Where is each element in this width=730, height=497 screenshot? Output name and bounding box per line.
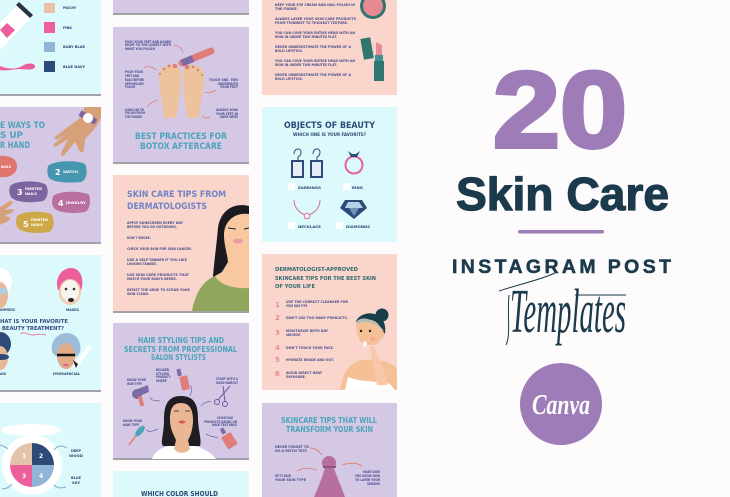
labels and question: MASKS <box>66 308 79 312</box>
checkboxes and labels: EARRINGS <box>298 186 321 190</box>
numbered list: YOUR SKIN TYPE. <box>285 304 308 308</box>
heading: E WAYS TO <box>0 121 45 131</box>
blobs: numbered list: 4 <box>58 199 64 208</box>
panel: ways to dress up your hand <box>0 107 101 244</box>
checkboxes and labels: RING <box>352 186 363 190</box>
numbered list: 3 <box>275 329 280 337</box>
checkboxes and labels: DIAMONDS <box>346 225 370 229</box>
text: tips <box>125 40 238 119</box>
subtitle: Instagram Post: INSTAGRAM POST <box>452 256 671 278</box>
text: tips list: BEFORE YOU GO OUTDOORS. <box>127 225 177 229</box>
panel: top lavender fragment <box>113 0 249 15</box>
heading: SECRETS FROM PROFESSIONAL <box>124 345 237 354</box>
blobs: numbered list: 5 <box>23 220 29 229</box>
arrows <box>0 445 67 489</box>
icon: serum bottle <box>220 427 238 450</box>
text: tips: YOUR SKIN TYPE <box>274 478 306 482</box>
blobs: numbered list: PAINTED <box>25 187 42 191</box>
icon: white mirror handle <box>1 424 61 436</box>
labels and question: ASK <box>0 372 6 376</box>
text: tips: APPLYING ANY <box>125 82 144 86</box>
text: tips: CHOOSE HAIR <box>217 416 233 420</box>
labels and question: HYDRAFACIAL <box>53 372 81 376</box>
colour labels: BLUE <box>71 476 81 480</box>
text: tips list: SKIN CLEAN. <box>127 292 150 296</box>
icon: ring <box>346 151 362 174</box>
blobs: numbered list: NAILS <box>25 192 38 196</box>
heading: SKIN CARE TIPS FROM <box>127 190 226 200</box>
icon: navy towel face <box>0 332 11 370</box>
text: tips: POLISH <box>125 85 135 89</box>
colour labels: DEEP <box>71 449 81 453</box>
colour labels <box>69 449 83 485</box>
heading: BOTOX AFTERCARE <box>140 142 222 152</box>
illustration: woman with towel <box>340 308 397 390</box>
blobs: numbered list: JEWELRY <box>65 201 87 205</box>
icon: hairbrush <box>129 424 146 445</box>
title number: 20: 20 <box>493 49 627 170</box>
text: tips: STYLING <box>156 372 169 376</box>
text: tips: WHAT YOU POLISH <box>125 47 155 51</box>
text: tips: YOU CAN COVE YOUR ENTIRE HEAD WITH AN <box>274 59 355 63</box>
icon: hand with watch <box>53 107 101 156</box>
legend swatches: PEACHY <box>63 6 76 10</box>
panel: which colour poll <box>113 471 249 497</box>
heading: DERMATOLOGIST-APPROVED <box>275 267 358 273</box>
legend swatches: PINK <box>63 26 72 30</box>
heading: OF YOUR LIFE <box>275 284 315 290</box>
arrows <box>297 448 362 471</box>
text: tips: BOLD LIPSTICK. <box>275 49 304 53</box>
heading <box>0 121 45 151</box>
heading <box>281 416 377 434</box>
text: tips: KNOW YOUR <box>127 378 146 382</box>
arrows <box>146 385 218 438</box>
text: tips: UNDERNEATH <box>218 82 238 86</box>
icon: lipstick <box>360 37 384 81</box>
text: tips: HAIR TYPE <box>123 423 139 427</box>
icon: earrings <box>292 149 322 177</box>
numbered list: AVOID DIRECT HEAT <box>286 371 322 375</box>
blobs: numbered list: NAILS <box>31 223 44 227</box>
text: tips: RIGHT TO THE LOWEST WITH <box>125 43 171 47</box>
text: tips: MAKE SURE <box>363 470 380 474</box>
icon: necklace <box>294 200 320 219</box>
badge: Canva logo <box>520 363 602 445</box>
icon: toenails <box>159 64 203 76</box>
icon: hydrafacial face <box>52 333 92 369</box>
panel: makeup tips <box>262 0 397 95</box>
numbered list: DON'T TOUCH YOUR FACE. <box>286 346 335 350</box>
text: tips <box>274 3 356 81</box>
text: tips: TOUCH ONE, TWO <box>209 78 238 82</box>
text: tips <box>123 368 238 427</box>
heading <box>135 132 227 152</box>
text: tips: BOLD LIPSTICK. <box>275 77 304 81</box>
text: tips list: MATCH YOUR SKIN'S NEEDS. <box>127 277 178 281</box>
text: tips list: CHECK YOUR SKIN FOR SKIN CANCER. <box>127 247 192 251</box>
text: tips list <box>127 221 192 296</box>
heading <box>127 190 226 212</box>
labels and question: HAT IS YOUR FAVORITE <box>0 319 68 325</box>
blobs: numbered list: NAILS <box>1 165 11 169</box>
text: tips list: DON'T SMOKE. <box>127 236 151 240</box>
text: tips: PRODUCT- <box>156 375 171 379</box>
text: tips: PRODUCTS BASED ON <box>204 420 237 424</box>
heading: SKINCARE TIPS THAT WILL <box>281 416 377 425</box>
illustration: woman with closed eyes <box>192 205 249 311</box>
icon: mask face <box>57 268 82 305</box>
text: tips: NAILS BEFORE <box>125 78 144 82</box>
text: tips: ALWAYS LAYER YOUR SKIN-CARE PRODUCTS <box>275 17 356 21</box>
text: tips: HAIR TEXTURES <box>212 423 237 427</box>
icon: scissors <box>214 386 230 406</box>
icon: compress face <box>0 268 12 308</box>
labels and question <box>0 308 81 376</box>
chart: colour wheel: 3 <box>22 473 26 480</box>
text: tips: ALWAYS ADD THE <box>125 108 144 112</box>
numbered list: AND NIGHT. <box>286 333 301 337</box>
icon: diamond <box>340 200 367 219</box>
text: tips: KNOW YOUR <box>123 419 142 423</box>
text: tips: BOLDER <box>156 368 169 372</box>
text: tips: FROM THINNEST TO THICKEST TEXTURE. <box>275 21 349 25</box>
colour labels: WOOD <box>69 454 83 458</box>
heading <box>124 336 237 362</box>
numbered list: 2 <box>275 314 280 322</box>
panel: favourite beauty treatment <box>0 255 101 392</box>
text: tips: DO A PATCH TEST <box>275 449 307 453</box>
icon: lotion tube <box>0 2 33 50</box>
text: tips: GOOD HAIRCUT <box>216 381 238 385</box>
icon: pink cream swipe <box>0 64 35 70</box>
text: tips <box>274 445 380 486</box>
icon: bottle <box>314 456 345 497</box>
title divider <box>518 230 604 234</box>
panel: dermatologist-approved tips <box>262 254 397 390</box>
heading: R HAND <box>0 141 30 151</box>
text: tips: HAIR TYPE <box>127 382 142 386</box>
numbered list: HYDRATE INSIDE AND OUT. <box>286 358 335 362</box>
text: tips: START WITH A <box>216 377 238 381</box>
text: tips list: LOOKING TANNED. <box>127 262 157 266</box>
numbered list: 4 <box>275 344 280 352</box>
arrows <box>144 45 216 118</box>
text: tips: NEVER UNDERESTIMATE THE POWER OF A <box>275 73 351 77</box>
panel: skincare tips that will transform your skin <box>262 403 397 497</box>
icon: hair dryer <box>132 385 149 406</box>
text: tips list: USE A SELF-TANNER IF YOU LIKE <box>127 258 187 262</box>
numbered list: 5 <box>275 356 280 364</box>
legend swatches: BABY BLUE <box>63 45 85 49</box>
text: tips list: RESIST THE URGE TO SCRUB YOUR <box>127 288 190 292</box>
panel: hair styling tips <box>113 323 249 460</box>
numbered list: USE THE CORRECT CLEANSER FOR <box>286 300 348 304</box>
panel: makeup colours <box>0 0 101 96</box>
text: tips list: APPLY SUNSCREEN EVERY DAY <box>127 221 183 225</box>
blobs: numbered list: 3 <box>17 188 23 197</box>
text: tips: IRON IN UNDER TWO MINUTES FLAT. <box>275 35 337 39</box>
heading: WHICH ONE IS YOUR FAVORITE? <box>293 132 366 138</box>
icon: compact <box>360 0 386 19</box>
heading: SKINCARE TIPS FOR THE BEST SKIN <box>275 276 376 282</box>
heading <box>275 267 376 290</box>
numbered list: 1 <box>275 301 280 309</box>
badge: Canva logo: Canva <box>532 390 590 421</box>
text: tips: WARM WATER <box>220 115 238 119</box>
text: tips: YOU KNOW HOW <box>354 474 380 478</box>
panel: objects of beauty <box>262 107 397 242</box>
icon: nail file <box>182 51 211 63</box>
chart: colour wheel: 1 <box>22 453 26 460</box>
text: tips: YOUR FEET <box>219 85 238 89</box>
text: tips: FEET AND <box>125 74 139 78</box>
text: tips: NEVER UNDERESTIMATE THE POWER OF A <box>275 45 351 49</box>
blobs: numbered list <box>0 156 90 233</box>
text: tips: PUSH YOUR <box>125 70 143 74</box>
heading: HAIR STYLING TIPS AND <box>138 336 224 345</box>
panel: skin care tips from dermatologists <box>113 175 249 313</box>
heading: OBJECTS OF BEAUTY <box>284 121 376 131</box>
text: tips: POLISH FROM <box>125 111 145 115</box>
colour labels: SKY <box>72 481 80 485</box>
heading <box>284 121 376 138</box>
text: tips: NEVER FORGET TO <box>275 445 309 449</box>
text: tips: THE FRIDGE. <box>275 7 299 11</box>
text: tips: TOES TOWARDS <box>125 115 142 119</box>
subtitle: Templates script: Templates <box>510 276 626 346</box>
blobs: numbered list: 2 <box>55 168 61 177</box>
numbered list: EXPOSURE. <box>286 375 307 379</box>
heading: TRANSFORM YOUR SKIN <box>286 425 373 434</box>
heading: S UP <box>0 131 23 141</box>
illustration: woman <box>152 396 216 459</box>
heading: SALON STYLISTS <box>151 353 206 362</box>
heading: DERMATOLOGISTS <box>127 202 207 212</box>
chart: colour wheel <box>2 435 62 495</box>
panel: colour wheel poll <box>0 403 101 497</box>
blobs: numbered list: WATCH <box>63 170 78 174</box>
chart: colour wheel: 2 <box>39 453 43 460</box>
icon: left hand fingers <box>0 201 13 225</box>
icon: bare feet <box>159 65 204 118</box>
blobs: numbered list: PAINTED <box>31 218 48 222</box>
numbered list: MOISTURIZE BOTH DAY <box>286 329 328 333</box>
text: tips: IRON IN UNDER TWO MINUTES FLAT. <box>275 63 337 67</box>
text: tips: KEEP YOUR EYE CREAM AND NAIL POLISH IN <box>275 3 355 7</box>
text: tips: GET TO KNOW <box>275 474 291 478</box>
numbered list: 6 <box>275 370 280 378</box>
panel: best practices botox aftercare <box>113 27 249 164</box>
text: tips: YOU CAN COVE YOUR ENTIRE HEAD WITH AN <box>274 31 355 35</box>
legend swatches <box>44 3 85 72</box>
text: tips list: USE SKIN CARE PRODUCTS THAT <box>127 273 189 277</box>
title: Skin Care: Skin Care <box>456 168 669 220</box>
chart: colour wheel: 4 <box>39 473 43 480</box>
icon: mousse bottle <box>176 369 190 391</box>
checkboxes and labels <box>288 183 370 229</box>
text: tips: TO LAYER YOUR <box>355 478 380 482</box>
text: tips: PUSH YOUR FEET AND HANDS <box>125 40 171 44</box>
text: tips: YOUR FEET IN <box>215 112 238 116</box>
checkboxes and labels: NECKLACE <box>298 225 321 229</box>
labels and question: BEAUTY TREATMENT? <box>2 326 64 332</box>
legend swatches: BLUE NAVY <box>63 65 85 69</box>
text: tips: SERUMS <box>367 482 380 486</box>
text: tips: SHEEP <box>156 379 167 383</box>
labels and question: OMPRESS <box>0 308 15 312</box>
text: tips: ALWAYS SOAK <box>216 108 238 112</box>
numbered list <box>275 300 349 379</box>
numbered list: DON'T USE TOO MANY PRODUCTS. <box>286 316 349 320</box>
heading: BEST PRACTICES FOR <box>135 132 227 142</box>
